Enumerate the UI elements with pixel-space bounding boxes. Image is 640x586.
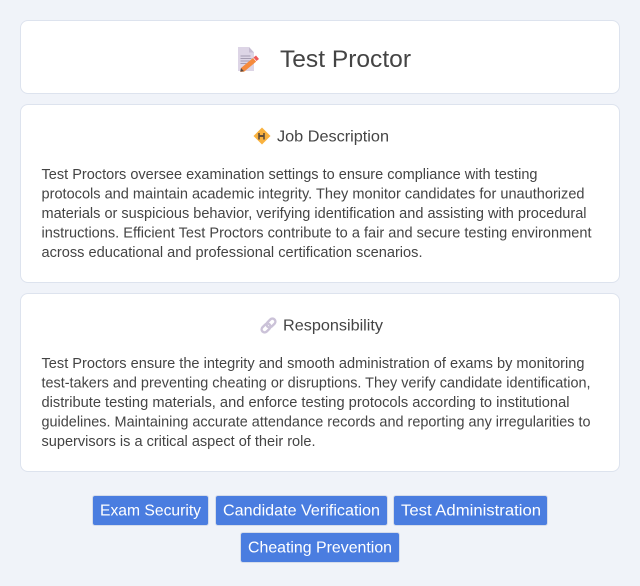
tag: exam security <box>92 495 209 526</box>
responsibility body text <box>42 356 591 450</box>
heading: job description: Job Description <box>277 128 389 146</box>
heading: job description <box>42 128 592 261</box>
tag: cheating prevention: Cheating Prevention <box>248 540 392 556</box>
responsibility body text: Test Proctors ensure the integrity and smooth administration of exams by monitoring <box>42 356 585 372</box>
title: Test Proctor <box>280 46 411 73</box>
responsibility body text: supervisors is a critical aspect of their role. <box>42 434 316 450</box>
heading: responsibility <box>42 318 591 450</box>
job description body text: materials or suspicious behavior, verifying identification and assisting with procedural <box>42 206 586 222</box>
icon: memo with pencil <box>238 47 259 72</box>
tag: cheating prevention <box>240 532 400 563</box>
panel: job description <box>20 104 620 283</box>
responsibility body text: guidelines. Maintaining accurate attendance records and reporting any irregularities to <box>42 414 591 430</box>
job description body text: instructions. Efficient Test Proctors contribute to a fair and secure testing environment <box>42 226 592 242</box>
icon: chain link <box>260 317 276 334</box>
tag: test administration: Test Administration <box>401 502 541 520</box>
heading: responsibility: Responsibility <box>283 318 383 334</box>
tag: exam security: Exam Security <box>100 502 201 520</box>
responsibility body text: test-takers and preventing cheating or disruptions. They verify candidate identification, <box>42 376 590 392</box>
job description body text: Test Proctors oversee examination settings to ensure compliance with testing <box>42 167 538 183</box>
job description body text: across educational and professional certification scenarios. <box>42 245 422 261</box>
tag: candidate verification: Candidate Verification <box>223 502 380 520</box>
job description body text <box>42 167 592 261</box>
panel: title card <box>20 20 620 94</box>
panel: responsibility <box>20 293 620 472</box>
tag: test administration <box>393 495 548 526</box>
job description body text: protocols and maintain academic integrity. They monitor candidates for unauthorized <box>42 186 585 202</box>
tag: candidate verification <box>215 495 388 526</box>
icon: orange diamond <box>254 128 270 144</box>
responsibility body text: distribute testing materials, and enforce testing protocols according to institutional <box>42 395 570 411</box>
